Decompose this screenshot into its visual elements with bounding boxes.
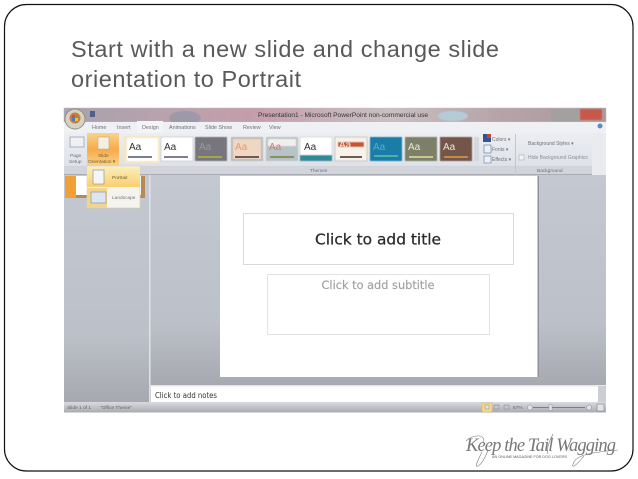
subtitle placeholder text: Click to add subtitle (322, 278, 434, 292)
tab row: Animations (169, 125, 196, 131)
tab row: Home (92, 125, 106, 131)
status bar: "Office Theme" (100, 405, 132, 411)
office button (65, 109, 95, 129)
page setup button (69, 137, 84, 165)
view buttons and zoom slider (482, 403, 604, 412)
orientation dropdown: Landscape (112, 195, 136, 201)
subtitle placeholder (268, 274, 490, 334)
notes pane: Click to add notes (155, 391, 217, 400)
slide orientation button: Slide (98, 153, 109, 159)
status bar: Slide 1 of 1 (67, 405, 91, 411)
title: orientation to Portrait (71, 66, 301, 92)
title placeholder (244, 214, 514, 264)
theme thumbnail labels: Aa (129, 142, 142, 153)
title: Start with a new slide and change slide (71, 36, 499, 62)
theme thumbnail labels: Aa (373, 142, 386, 153)
tab row: Review (243, 125, 261, 131)
title bar (64, 108, 606, 125)
logo wordmark: Keep the Tail Wagging (465, 436, 616, 456)
logo script flourishes (466, 434, 618, 466)
left thumbnail pane (64, 175, 149, 402)
theme options: Effects ▾ (492, 157, 512, 163)
theme options: Background (537, 168, 563, 174)
theme thumbnail labels: Aa (443, 142, 456, 153)
theme thumbnail labels: Aa (164, 142, 177, 153)
slide orientation button: Orientation ▾ (88, 159, 116, 165)
tab row: Insert (117, 125, 131, 131)
theme options: Hide Background Graphics (528, 155, 588, 161)
slide orientation button (87, 133, 119, 166)
status bar: 67% (513, 405, 523, 411)
status bar (64, 402, 606, 412)
theme thumbnail labels: Aa (339, 140, 352, 151)
theme options: Colors ▾ (492, 137, 511, 143)
theme options: Themes (310, 168, 328, 174)
page setup button: Setup (69, 159, 82, 165)
tab row (64, 121, 606, 134)
theme thumbnail labels: Aa (235, 142, 248, 153)
screenshot: PowerPoint window (64, 108, 606, 412)
theme options: Background Styles ▾ (528, 141, 574, 147)
theme thumbnail labels: Aa (269, 142, 282, 153)
theme options (310, 134, 588, 174)
orientation dropdown: Portrait (112, 175, 128, 181)
theme options: Fonts ▾ (492, 147, 509, 153)
theme thumbnail labels (129, 140, 456, 153)
theme thumbnails (124, 136, 479, 163)
theme swatch dots (128, 155, 468, 158)
theme thumbnail labels: Aa (408, 142, 421, 153)
tab row: View (269, 125, 281, 131)
logo: Keep the Tail Wagging (465, 434, 618, 466)
orientation dropdown (87, 166, 140, 208)
page setup button: Page (70, 153, 82, 159)
notes pane (150, 385, 606, 402)
ribbon (64, 133, 606, 176)
slide canvas (220, 176, 539, 377)
window background (64, 108, 606, 412)
tab row: Slide Show (205, 125, 232, 131)
title placeholder text: Click to add title (315, 230, 441, 248)
title (71, 36, 499, 92)
theme thumbnail labels: Aa (199, 142, 212, 153)
right work area (149, 175, 606, 402)
title bar text: Presentation1 - Microsoft PowerPoint non-commercial use (258, 112, 428, 119)
tab row: Design (142, 125, 159, 131)
logo tagline: AN ONLINE MAGAZINE FOR DOG LOVERS (492, 454, 567, 459)
theme thumbnail labels: Aa (304, 142, 317, 153)
